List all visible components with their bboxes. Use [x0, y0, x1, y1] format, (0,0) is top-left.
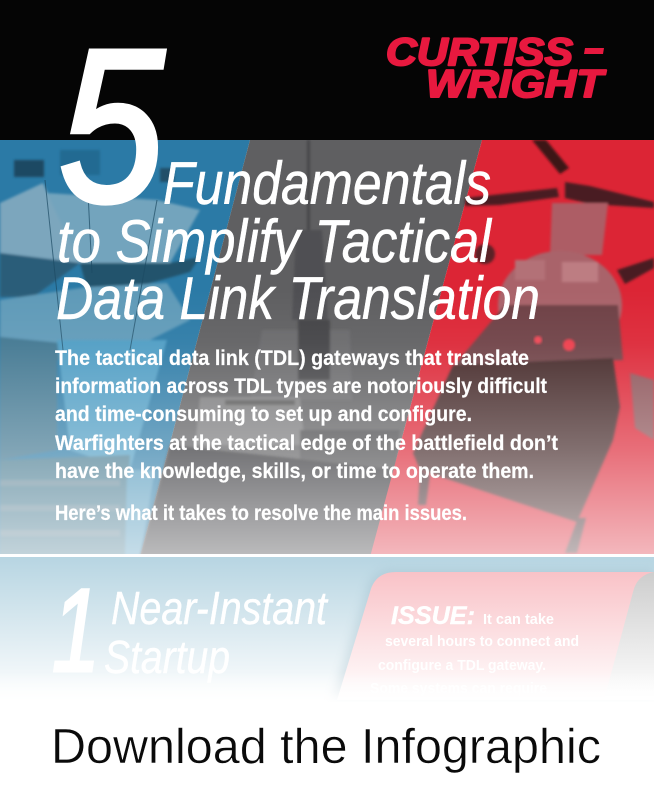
black header band	[0, 0, 654, 140]
heading Near-Instant Startup	[104, 582, 329, 683]
issue text: configure a TDL gateway.	[378, 657, 546, 674]
head	[550, 203, 608, 255]
heading Near-Instant Startup: Near-Instant	[111, 582, 329, 634]
intro text block: The tactical data link (TDL) gateways that translate	[55, 347, 529, 370]
panel: issue card	[332, 570, 654, 700]
title numeral 5: 5	[59, 5, 165, 248]
logo: Curtiss-Wright	[386, 31, 607, 106]
logo: Curtiss-Wright: WRIGHT	[426, 63, 607, 106]
call to action: Download the Infographic: Download the Infographic	[51, 720, 601, 774]
photo fade overlay	[0, 290, 654, 557]
masts	[45, 180, 157, 350]
title line 3: Data Link Translation	[56, 265, 540, 332]
title	[56, 5, 540, 332]
intro text block: Warfighters at the tactical edge of the battlefield don’t	[55, 432, 558, 455]
dome	[498, 251, 622, 359]
lower white fade	[0, 672, 654, 702]
intro text block: and time-consuming to set up and configure.	[55, 403, 472, 426]
issue text: It can take	[483, 611, 554, 628]
panel: red helicopter	[370, 140, 654, 557]
next card edge	[604, 572, 654, 700]
panel: gray warship	[140, 140, 482, 557]
intro text block: Here’s what it takes to resolve the main issues.	[55, 502, 467, 525]
photo panel: tricolour hero background	[0, 140, 654, 557]
right-side object	[630, 373, 654, 440]
lower body	[453, 305, 623, 367]
title line 1: Fundamentals	[163, 150, 491, 217]
numeral 1: 1	[52, 565, 100, 697]
landing gear	[565, 518, 586, 553]
intro text block	[55, 347, 558, 525]
title line 2: to Simplify Tactical	[57, 208, 492, 275]
logo: Curtiss-Wright: CURTISS	[386, 31, 573, 74]
rotor blades	[532, 140, 569, 174]
issue text: Some systems can require	[370, 680, 547, 697]
issue text: ISSUE:	[391, 602, 475, 630]
small ball and struts	[475, 244, 495, 264]
white footer	[0, 702, 654, 800]
panel: section 1 fading background	[0, 557, 654, 702]
issue text: several hours to connect and	[385, 633, 579, 650]
intro text block: information across TDL types are notoriously difficult	[55, 375, 547, 398]
section 1 heading	[52, 565, 329, 697]
intro text block: have the knowledge, skills, or time to operate them.	[55, 460, 534, 483]
white divider	[0, 554, 654, 557]
panel: blue aircraft carrier deck	[0, 140, 250, 557]
heading Near-Instant Startup: Startup	[104, 631, 230, 683]
issue text	[370, 602, 579, 697]
